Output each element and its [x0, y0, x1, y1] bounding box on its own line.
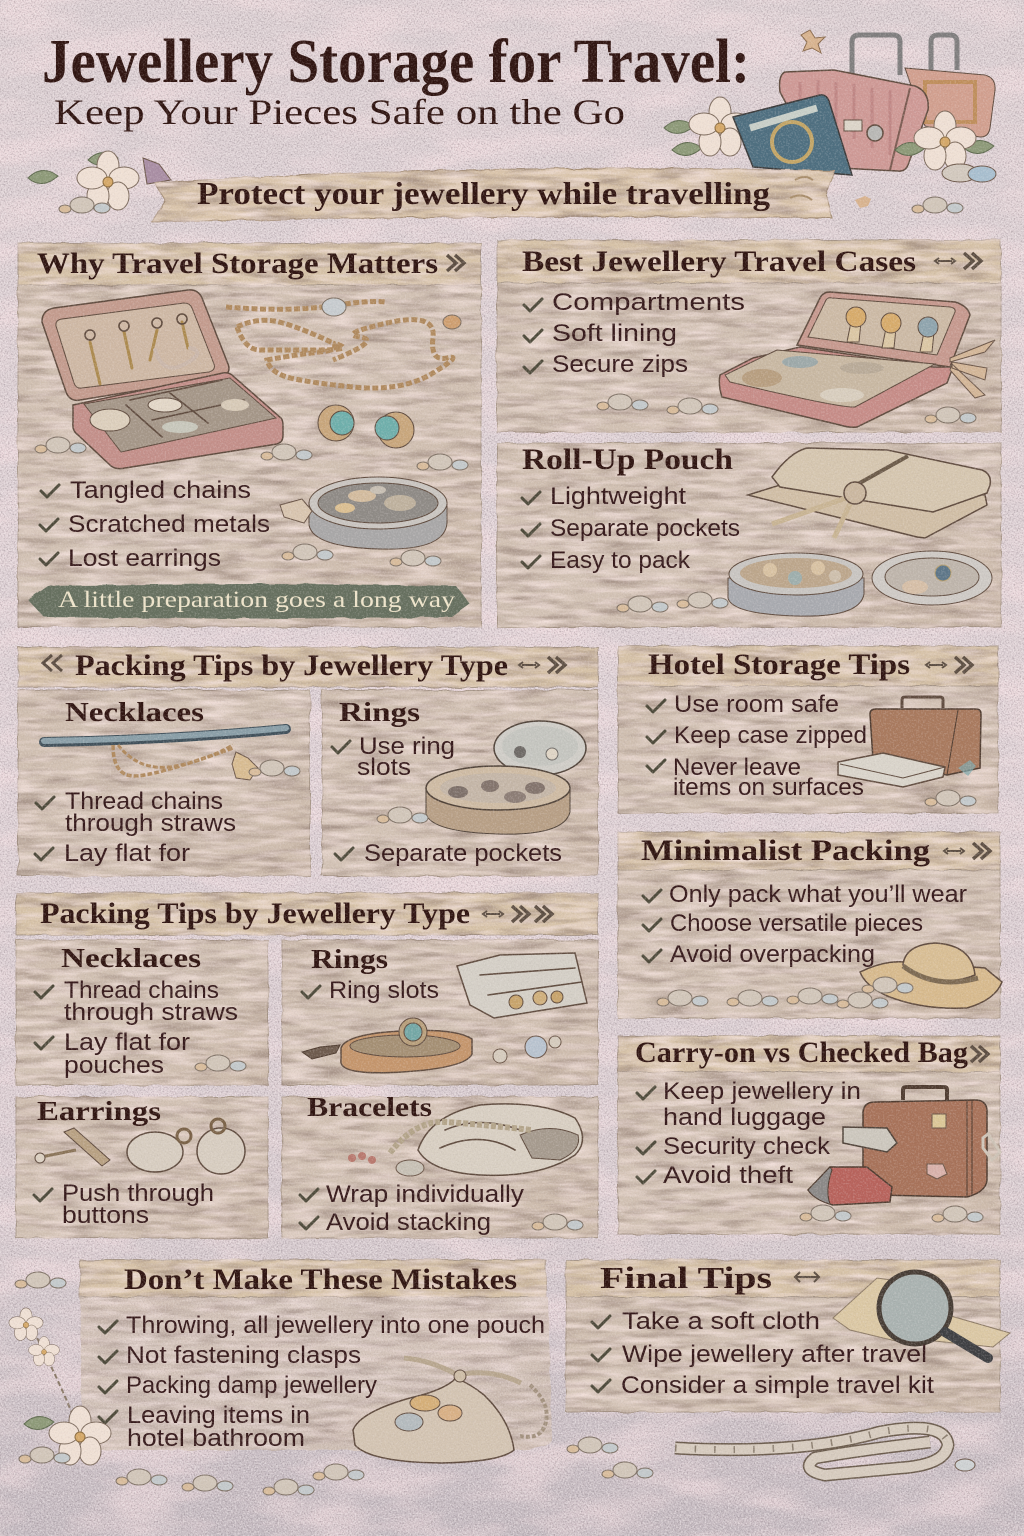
checklist: mistakes: Not fastening clasps: [126, 1342, 361, 1369]
checklist: hotel: [647, 691, 867, 801]
header band: packing tips upper: [18, 647, 598, 687]
header band: minimalist: Minimalist Packing: [641, 834, 930, 867]
checklist: roll-up: Separate pockets: [550, 515, 740, 542]
checklist: minimalist: Choose versatile pieces: [670, 910, 923, 937]
card: necklaces: through straws: [65, 810, 236, 837]
checklist: best cases: [524, 289, 745, 378]
checklist: why: Lost earrings: [68, 545, 221, 572]
pebbles: [532, 1214, 583, 1230]
checklist: carry-on: [637, 1078, 861, 1189]
panel: roll-up pouch: [497, 443, 1001, 627]
checklist: carry-on: Keep jewellery in: [663, 1078, 861, 1105]
checklist: best cases: Compartments: [552, 289, 745, 316]
checklist: why: [40, 477, 270, 572]
illustration: tangled beaded necklace: [226, 298, 461, 388]
illustration: open travel case: [719, 292, 995, 427]
ribbon banner: [152, 168, 835, 222]
card: bracelets: Wrap individually: [326, 1181, 524, 1208]
card: bracelets: [282, 1092, 598, 1238]
panel: final tips: [566, 1260, 1010, 1412]
illustration: roll pouch and tins: [728, 448, 992, 616]
header band: packing tips lower: [16, 893, 598, 935]
card: necklaces lower: pouches: [64, 1052, 164, 1079]
illustration: pair of rings: [318, 405, 414, 448]
pebbles: [195, 1055, 246, 1071]
header band: final tips: [566, 1260, 1000, 1297]
illustration: suitcase and tray: [838, 697, 981, 806]
panel: don't make these mistakes: [80, 1260, 552, 1463]
heading: roll-up pouch: Roll-Up Pouch: [522, 443, 733, 476]
checklist: mistakes: Throwing, all jewellery into one pouch: [126, 1312, 545, 1339]
card: necklaces: Lay flat for: [64, 840, 190, 867]
illustration: round tin with jewellery: [280, 477, 447, 560]
checklist: hotel: Use room safe: [674, 691, 839, 718]
card: necklaces lower: Thread chains: [64, 977, 219, 1004]
header band: minimalist: [618, 832, 1000, 870]
illustration: left flower: [28, 151, 171, 213]
illustration: suitcase, tag and pouch: [800, 1087, 1000, 1222]
pebbles: [657, 977, 913, 1008]
illustration: bottom-left floral corner: [9, 1272, 364, 1495]
checklist: roll-up: Lightweight: [550, 483, 686, 510]
illustration: beaded bracelet and pouch: [348, 1104, 582, 1176]
header band: best cases: [497, 240, 1001, 283]
pebbles: [617, 592, 728, 612]
panel: packing tips by jewellery type (upper): [18, 647, 598, 876]
checklist: hotel: Keep case zipped: [674, 722, 867, 749]
subtitle: Keep Your Pieces Safe on the Go: [54, 92, 625, 132]
illustration: earrings on buttons: [35, 1119, 245, 1174]
card: necklaces: Necklaces: [65, 697, 204, 727]
checklist: mistakes: Packing damp jewellery: [126, 1372, 377, 1399]
checklist: minimalist: Avoid overpacking: [670, 941, 875, 968]
card: necklaces lower: through straws: [64, 999, 238, 1026]
card: bracelets: Bracelets: [307, 1092, 432, 1122]
illustration: magnifying glass and cloth: [833, 1272, 1010, 1358]
checklist: final tips: Consider a simple travel kit: [621, 1372, 934, 1399]
pebbles: [597, 394, 718, 414]
checklist: final tips: [592, 1308, 934, 1399]
card: rings: [322, 690, 598, 876]
card: rings lower: [282, 940, 598, 1085]
header band: why: [18, 243, 481, 285]
card: earrings: Push through: [62, 1180, 214, 1207]
illustration: ring tin: [377, 721, 586, 834]
callout banner: A little preparation goes a long way: [58, 587, 456, 612]
checklist: carry-on: Security check: [663, 1133, 831, 1160]
illustration: chain through straw: [44, 728, 300, 780]
panel: minimalist packing: [618, 832, 1002, 1018]
panel: why travel storage matters: [18, 243, 481, 627]
header band: why: Why Travel Storage Matters: [37, 247, 438, 280]
ribbon banner: Protect your jewellery while travelling: [197, 175, 770, 211]
callout banner: [28, 584, 470, 618]
header band: best cases: Best Jewellery Travel Cases: [522, 245, 916, 278]
card: earrings: [16, 1096, 268, 1238]
card: earrings: buttons: [62, 1202, 149, 1229]
title: Jewellery Storage for Travel:: [42, 28, 750, 96]
header band: packing tips upper: Packing Tips by Jewellery Type: [75, 649, 508, 682]
illustration: tied jewellery pouch: [353, 1358, 547, 1463]
checklist: minimalist: [643, 881, 967, 968]
scattered pebbles: [35, 437, 468, 566]
card: necklaces lower: Necklaces: [61, 943, 201, 973]
illustration: suitcases, passport and flowers: [664, 30, 996, 213]
illustration: open jewellery box: [42, 290, 283, 469]
card: rings: slots: [357, 754, 411, 781]
header band: mistakes: [80, 1260, 546, 1297]
checklist: roll-up: [522, 483, 740, 574]
panel: packing tips by jewellery type (lower): [16, 893, 598, 1238]
checklist: final tips: Wipe jewellery after travel: [622, 1341, 927, 1368]
header band: packing tips lower: Packing Tips by Jewellery Type: [40, 897, 470, 930]
illustration: sun hat: [860, 943, 1002, 1008]
checklist: hotel: items on surfaces: [673, 774, 864, 801]
card: necklaces: [18, 690, 310, 876]
illustration: ring slot cards and bracelet: [302, 953, 587, 1073]
checklist: carry-on: Avoid theft: [663, 1162, 793, 1189]
header band: hotel: [618, 646, 998, 686]
card: rings lower: Ring slots: [329, 977, 439, 1004]
checklist: best cases: Soft lining: [552, 320, 677, 347]
card: necklaces: Thread chains: [65, 788, 223, 815]
card: necklaces lower: Lay flat for: [64, 1029, 190, 1056]
checklist: best cases: Secure zips: [552, 351, 688, 378]
checklist: why: Scratched metals: [68, 511, 270, 538]
checklist: hotel: Never leave: [673, 754, 801, 781]
header band: final tips: Final Tips: [600, 1260, 772, 1295]
card: earrings: Earrings: [37, 1096, 161, 1126]
checklist: mistakes: Leaving items in: [127, 1402, 310, 1429]
card: bracelets: Avoid stacking: [326, 1209, 491, 1236]
header band: mistakes: Don’t Make These Mistakes: [124, 1263, 517, 1296]
card: rings: Use ring: [359, 733, 455, 760]
checklist: minimalist: Only pack what you’ll wear: [669, 881, 967, 908]
card: rings: Rings: [339, 697, 420, 727]
card: rings: Separate pockets: [364, 840, 562, 867]
checklist: mistakes: [99, 1312, 545, 1452]
illustration: measuring tape and pebbles: [567, 1428, 975, 1478]
checklist: mistakes: hotel bathroom: [127, 1425, 305, 1452]
panel: best jewellery travel cases: [497, 240, 1001, 432]
checklist: carry-on: hand luggage: [663, 1104, 826, 1131]
card: rings lower: Rings: [311, 944, 388, 974]
checklist: roll-up: Easy to pack: [550, 547, 691, 574]
card: necklaces lower: [16, 940, 268, 1085]
header band: carry-on: Carry-on vs Checked Bag: [635, 1036, 968, 1069]
checklist: final tips: Take a soft cloth: [622, 1308, 820, 1335]
panel: hotel storage tips: [618, 646, 998, 813]
checklist: why: Tangled chains: [70, 477, 251, 504]
panel: carry-on vs checked bag: [618, 1036, 1000, 1234]
header band: hotel: Hotel Storage Tips: [648, 648, 910, 681]
